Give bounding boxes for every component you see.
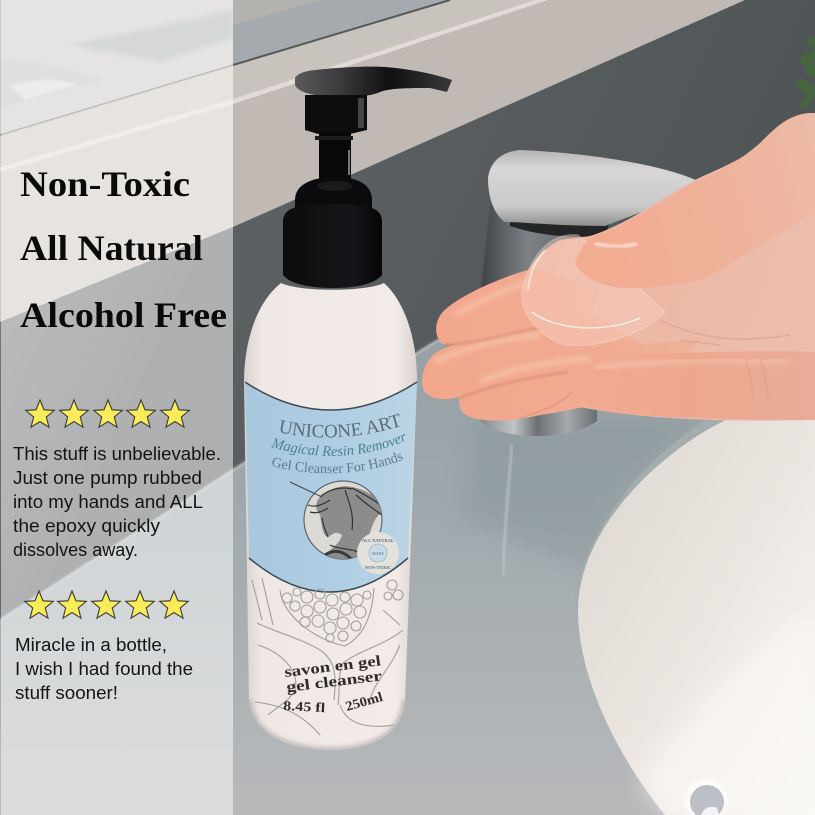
- finger highlights and creases: [435, 282, 790, 418]
- faucet: [478, 150, 700, 436]
- second review text: Miracle in a bottle,: [15, 634, 167, 655]
- palm: [520, 113, 815, 421]
- headline claims: Alcohol Free: [20, 295, 227, 335]
- first review text: [13, 443, 221, 560]
- unicorn medallion: [290, 481, 384, 562]
- headline claims: Non-Toxic: [20, 164, 190, 204]
- stone ledge: [0, 0, 745, 322]
- thumb: [575, 113, 815, 288]
- hand holding gel: [422, 113, 815, 421]
- first review text: dissolves away.: [13, 539, 138, 560]
- second review text: [15, 634, 193, 703]
- first review text: Just one pump rubbed: [13, 467, 202, 488]
- sink rim: [572, 405, 815, 620]
- gel blob: [522, 235, 665, 345]
- first review text: into my hands and ALL: [13, 491, 203, 512]
- index finger: [436, 268, 600, 345]
- dark back wall: [0, 0, 815, 620]
- natural seal: [357, 532, 399, 574]
- sink basin: [578, 416, 815, 815]
- drain: [685, 779, 727, 815]
- label text: Gel Cleanser For Hands: [272, 452, 403, 474]
- pump head: [295, 67, 452, 97]
- headline claims: All Natural: [20, 228, 203, 268]
- bottle lower text: 8.45 fl: [283, 698, 326, 715]
- second review text: stuff sooner!: [15, 682, 118, 703]
- bottle lower text: 250ml: [344, 689, 385, 714]
- ring finger: [459, 340, 700, 421]
- natural seal: MADE: [372, 551, 384, 556]
- headline claims: [20, 164, 227, 335]
- bottle lower text: [283, 653, 385, 715]
- line art pattern: [252, 578, 403, 735]
- second review text: I wish I had found the: [15, 658, 193, 679]
- middle finger: [422, 318, 660, 399]
- plant: [797, 37, 815, 108]
- five star rating: second review: [25, 591, 188, 618]
- cap: [283, 177, 382, 288]
- pump stem: [315, 132, 353, 182]
- label text: [270, 414, 406, 474]
- natural seal: NON-TOXIC: [365, 565, 391, 570]
- first review text: This stuff is unbelievable.: [13, 443, 221, 464]
- label text: Magical Resin Remover: [270, 434, 406, 456]
- product bottle: [244, 66, 452, 750]
- pinky: [569, 351, 815, 420]
- bottle lower text: savon en gel: [284, 653, 382, 681]
- label: [244, 381, 418, 593]
- five star rating: first review: [26, 400, 189, 427]
- first review text: the epoxy quickly: [13, 515, 161, 536]
- label text: UNICONE ART: [280, 414, 400, 438]
- natural seal: ALL NATURAL: [362, 538, 394, 543]
- left translucent panel: [1, 0, 233, 815]
- mirror above the ledge: [0, 0, 450, 135]
- bottle body: [244, 283, 417, 750]
- pump collar: [305, 95, 367, 134]
- bottle lower text: gel cleanser: [286, 668, 383, 696]
